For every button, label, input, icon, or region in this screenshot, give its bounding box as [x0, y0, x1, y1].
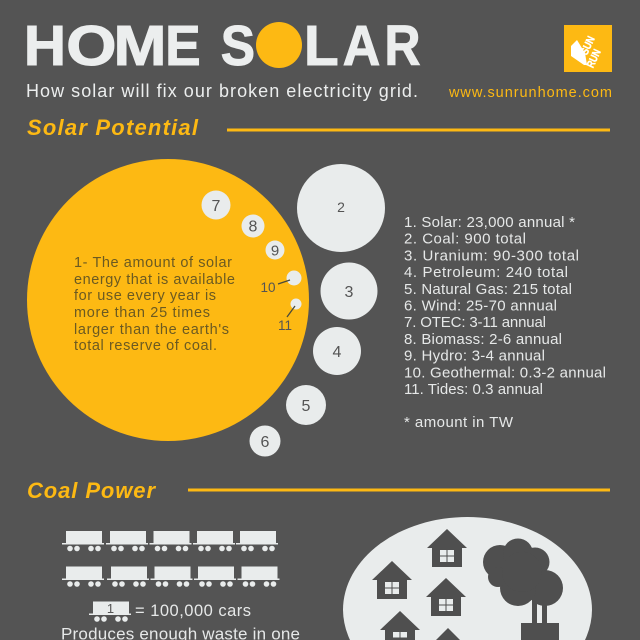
coal plant with smoke: [483, 538, 563, 640]
energy list: 10. Geothermal: 0.3-2 annual: [404, 364, 606, 381]
circle numbers: 9: [271, 242, 279, 260]
houses: [372, 529, 467, 640]
circle numbers: [212, 198, 354, 451]
circle numbers: 8: [249, 218, 258, 236]
leader lines: [278, 280, 295, 317]
energy list: 8. Biomass: 2-6 annual: [404, 331, 562, 348]
title: HOME SOLAR: R: [384, 15, 420, 78]
subtitle: How solar will fix our broken electricity grid.: [26, 81, 418, 101]
title: HOME SOLAR: [24, 14, 420, 78]
heading: Coal Power: Coal Power: [27, 478, 156, 503]
energy list: 7. OTEC: 3-11 annual: [404, 314, 546, 331]
oval: homes and coal plant: [343, 517, 592, 640]
energy list: 3. Uranium: 90-300 total: [404, 247, 579, 264]
heading: Solar Potential: Solar Potential: [27, 115, 199, 140]
train legend: = 100,000 cars: [135, 602, 251, 620]
energy list: 1. Solar: 23,000 annual *: [404, 214, 575, 231]
chart: solar potential circles: [27, 159, 385, 456]
circle numbers: 2: [337, 199, 345, 215]
sun circle with callout text: total reserve of coal.: [74, 338, 217, 354]
title: HOME SOLAR: E: [165, 15, 201, 77]
train cars row 2: [62, 566, 280, 587]
resource circles 2 to 11: [202, 164, 385, 456]
title: HOME SOLAR: H: [24, 15, 66, 78]
title: HOME SOLAR: A: [343, 15, 380, 77]
energy list: 2. Coal: 900 total: [404, 231, 526, 248]
train legend: [89, 601, 251, 622]
energy list: 4. Petroleum: 240 total: [404, 264, 568, 281]
circle numbers: 6: [261, 434, 270, 451]
circle numbers: 10: [260, 280, 276, 295]
train legend: 1: [107, 601, 114, 616]
circle numbers: 5: [302, 398, 311, 415]
circle numbers: 7: [212, 198, 221, 215]
train cars row 1: [62, 531, 278, 551]
website url: www.sunrunhome.com: [448, 85, 612, 101]
energy list: 11. Tides: 0.3 annual: [404, 381, 543, 398]
sun circle with callout text: energy that is available: [74, 272, 235, 288]
logo: Sunrun: [564, 25, 612, 72]
energy list: 5. Natural Gas: 215 total: [404, 281, 572, 298]
energy list: * amount in TW: [404, 414, 514, 431]
energy list: 6. Wind: 25-70 annual: [404, 298, 557, 314]
title: HOME SOLAR: L: [304, 14, 339, 77]
title: HOME SOLAR: S: [221, 15, 255, 78]
sun circle with callout text: for use every year is: [74, 288, 216, 304]
sun circle with callout text: larger than the earth's: [74, 322, 229, 338]
energy list: 9. Hydro: 3-4 annual: [404, 348, 545, 365]
sun circle with callout text: [27, 159, 309, 441]
logo: Sunrun: SUN: [579, 35, 598, 57]
circle numbers: 11: [278, 318, 292, 333]
circle numbers: 3: [345, 284, 354, 301]
logo: Sunrun: RUN: [585, 48, 604, 70]
energy list: [404, 214, 606, 431]
sun circle with callout text: 1- The amount of solar: [74, 255, 232, 271]
title: HOME SOLAR: M: [114, 14, 166, 77]
circle numbers: 4: [333, 344, 342, 361]
sun circle with callout text: more than 25 times: [74, 305, 210, 321]
title: HOME SOLAR: O: [66, 14, 116, 77]
